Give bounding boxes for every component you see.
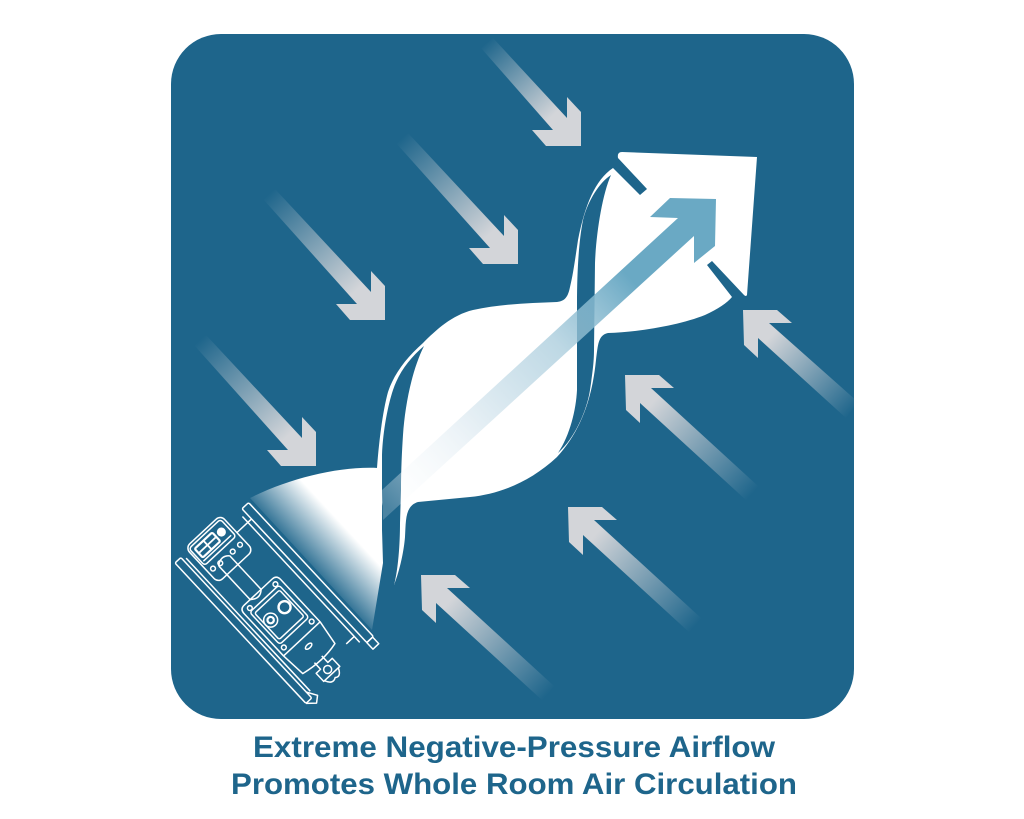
control box xyxy=(185,515,253,583)
arrow: bottom xyxy=(421,575,554,701)
caption line 1: Extreme Negative-Pressure Airflow xyxy=(253,731,776,764)
arrow: middle right xyxy=(625,375,758,501)
arrow: second xyxy=(396,133,518,264)
white twisting airflow ribbon xyxy=(377,152,757,592)
incoming air arrows from lower right xyxy=(421,310,858,701)
arrow: third xyxy=(263,189,385,320)
main body xyxy=(240,575,340,677)
caption xyxy=(231,731,797,801)
connecting neck xyxy=(216,553,261,600)
adjustment knob xyxy=(310,652,344,686)
arrow: right edge xyxy=(743,310,858,418)
right rail xyxy=(227,503,380,663)
incoming air arrows from upper left xyxy=(194,38,581,466)
arrow: fourth xyxy=(194,335,316,466)
light fan fading toward the machine xyxy=(250,468,383,630)
central rising airflow arrow xyxy=(382,198,716,520)
left rail xyxy=(175,553,321,709)
arrow: top xyxy=(481,38,581,146)
arrow: middle low xyxy=(568,507,701,633)
panel: blue rounded background xyxy=(171,34,854,719)
icon: machine line drawing xyxy=(172,495,380,709)
caption line 2: Promotes Whole Room Air Circulation xyxy=(231,768,797,801)
